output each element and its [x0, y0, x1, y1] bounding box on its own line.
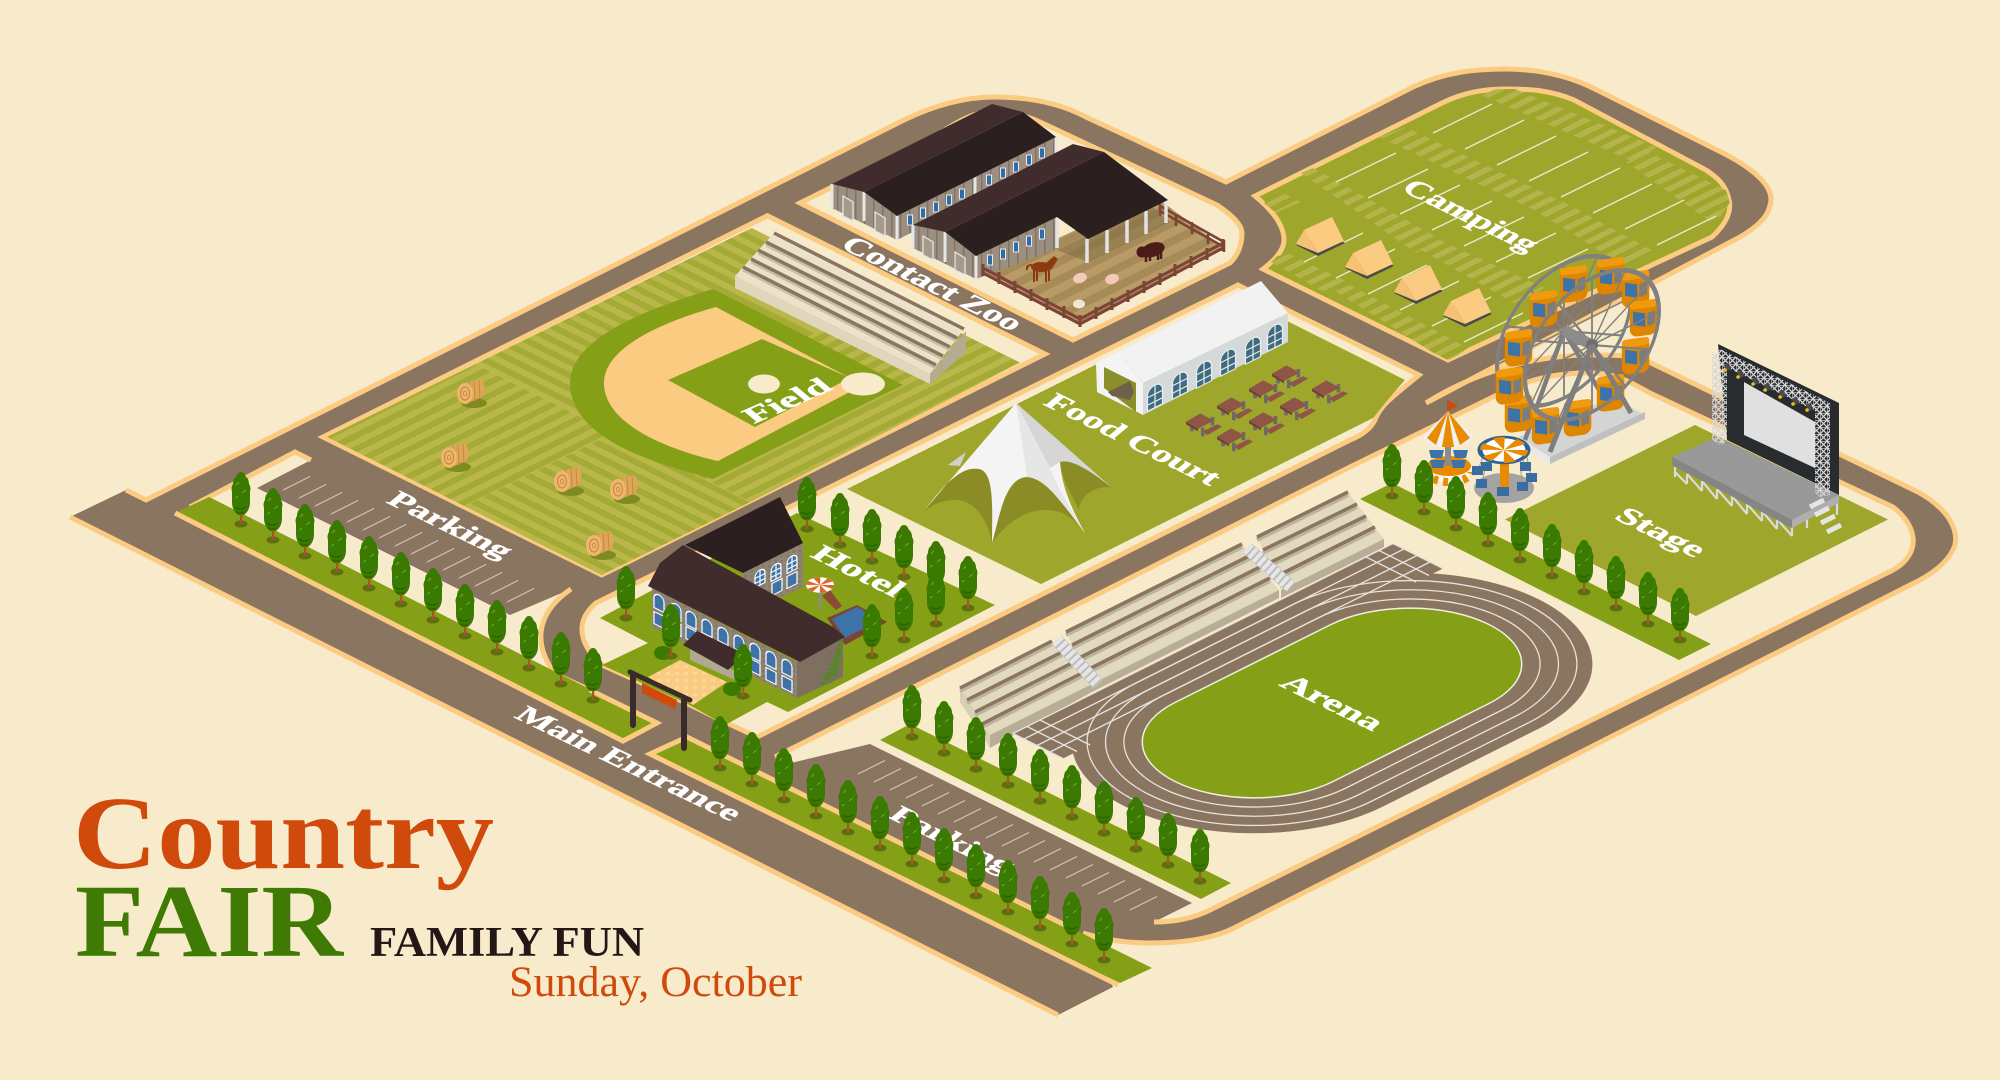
sheep: [1073, 300, 1085, 308]
tree row on arena strip: [903, 685, 1209, 885]
front ring: [1525, 244, 1659, 446]
tents: [1296, 217, 1492, 327]
panel: camping: [1255, 85, 1735, 362]
tree strip two base: [650, 737, 1152, 983]
stage tree strip: [1360, 483, 1711, 660]
star tent: [923, 403, 1111, 543]
stage platform: [1672, 437, 1839, 536]
panel: arena block: [775, 373, 1913, 922]
back fence: [1160, 204, 1224, 252]
baseball infield sand: [604, 307, 863, 461]
axle and front legs: [1550, 332, 1631, 452]
date line: Sunday, October: [509, 959, 802, 1006]
stage white screen: [1744, 382, 1815, 468]
label: stage: Stage: [1608, 502, 1715, 562]
label: main entrance: Main Entrance: [508, 701, 750, 826]
rear legs: [1525, 331, 1605, 440]
running track and arena pitch: [996, 535, 1668, 871]
label: contact zoo: Contact Zoo: [834, 231, 1032, 336]
pig two: [1104, 272, 1120, 286]
farm animals: [1027, 239, 1167, 308]
tree rows on strip two: [711, 716, 1113, 964]
panel: parking block one: [190, 452, 590, 690]
patio cobbles: [648, 660, 727, 705]
hotel porch: [683, 631, 745, 680]
pen ground: [983, 195, 1223, 323]
strip two border: [650, 737, 1118, 985]
arena tree strip: [880, 724, 1231, 899]
home plate circle: [841, 372, 885, 396]
title block: [73, 776, 802, 1006]
camping striped bands: [1264, 85, 1735, 362]
striped field grass: [327, 228, 1020, 575]
umbrella and lounger: [806, 577, 842, 610]
gondolas: [1496, 257, 1657, 446]
ferris platform: [1518, 397, 1645, 464]
stage trusses: [1712, 348, 1830, 497]
hay bales: [441, 379, 640, 560]
label: parking one: Parking: [380, 486, 522, 564]
swing ride: [1472, 437, 1537, 503]
stage stairs: [1810, 500, 1841, 532]
white marquee: [1096, 281, 1288, 415]
stage lawn: [1505, 425, 1888, 616]
hotel main wing: [648, 545, 845, 698]
picnic tables: [1186, 365, 1348, 451]
title: Country: Country: [73, 776, 494, 891]
title: FAIR: FAIR: [75, 864, 345, 979]
label: field: Field: [735, 373, 839, 428]
camping pitch lines: [1304, 104, 1716, 342]
panel: food court: [847, 281, 1405, 584]
barn two with shelter: [913, 144, 1170, 280]
bull: [1136, 239, 1167, 262]
hotel back trees: [617, 477, 977, 622]
front fence: [983, 239, 1223, 327]
food court lawn: [847, 295, 1405, 584]
ferris wheel: [1496, 230, 1659, 464]
baseball outfield: [570, 289, 903, 479]
horse: [1027, 256, 1058, 282]
concert stage: [1672, 344, 1841, 536]
label: hotel: Hotel: [804, 540, 914, 602]
parking bays one: [283, 476, 534, 602]
panel: hotel grounds: [600, 477, 995, 725]
stage lights: [1725, 366, 1812, 410]
field bleachers: [735, 233, 966, 384]
ivy: [822, 640, 841, 684]
rear ring: [1497, 230, 1631, 432]
hotel lawn: [600, 513, 995, 725]
label: parking two: Parking: [882, 801, 1024, 879]
arena bleachers: [960, 492, 1384, 748]
hotel front trees and bushes: [654, 572, 945, 700]
entrance gate: [630, 672, 690, 748]
label: arena: Arena: [1273, 669, 1393, 736]
tree row on stage strip: [1383, 444, 1689, 644]
panel: contact zoo block: [800, 104, 1242, 340]
parking bays two: [858, 760, 1157, 910]
carousel: [1424, 400, 1473, 482]
tree strip one: [175, 472, 657, 741]
label: camping: Camping: [1395, 174, 1548, 257]
stage screen backing: [1718, 344, 1839, 495]
swimming pool: [827, 605, 887, 645]
baseball diamond grass: [668, 339, 850, 427]
subtitle: family fun: FAMILY FUN: [370, 920, 644, 966]
panel: field block: [323, 216, 1045, 575]
pitcher mound: [748, 374, 780, 394]
barn one: [832, 104, 1056, 240]
hotel rear wing: [685, 497, 803, 602]
label: food court: Food Court: [1037, 388, 1230, 491]
panel: central block: [582, 285, 1419, 737]
pig one: [1072, 271, 1088, 285]
